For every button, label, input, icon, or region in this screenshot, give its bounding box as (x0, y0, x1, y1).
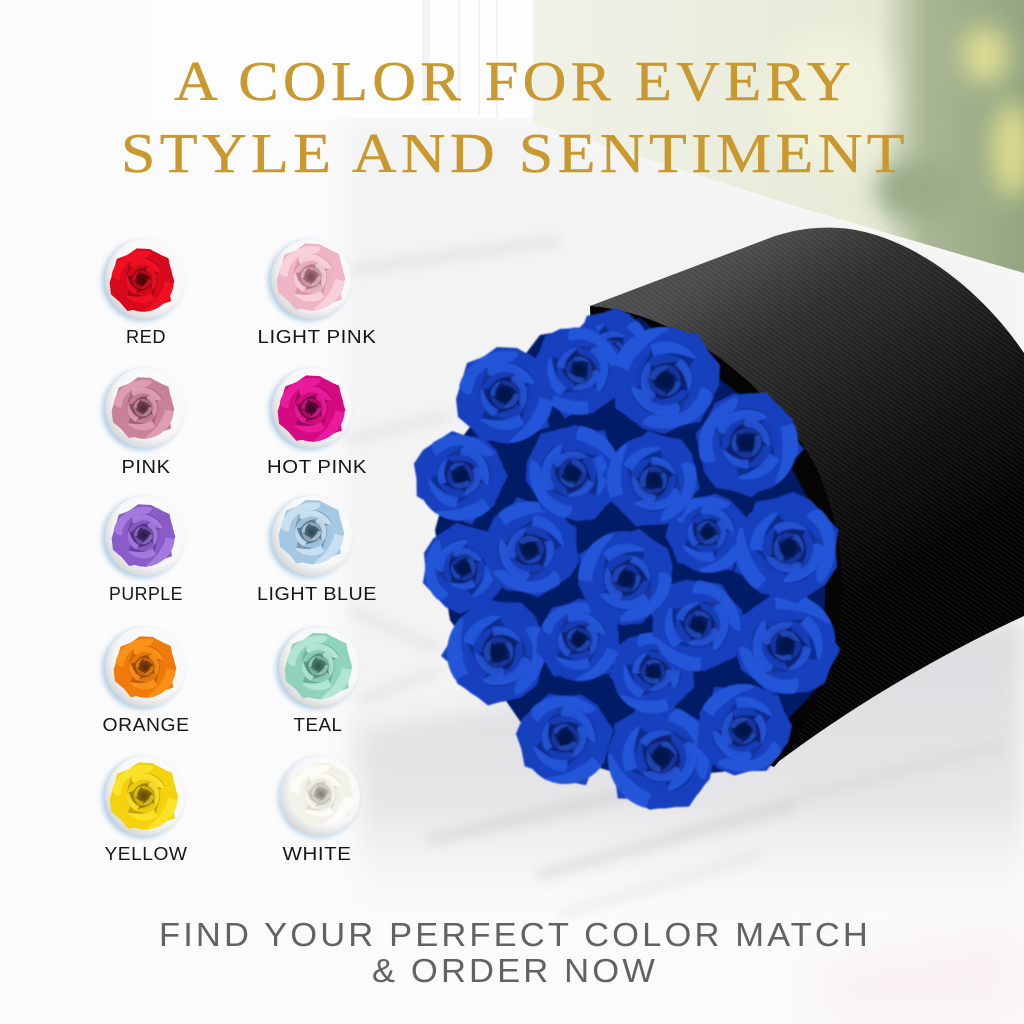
swatch: white: WHITE (282, 844, 352, 864)
title (121, 51, 909, 185)
swatch: red: RED (126, 327, 166, 347)
swatch: light pink (258, 239, 376, 347)
swatch: red (102, 239, 185, 347)
product: blue roses bouquet (397, 295, 859, 819)
swatch: purple: PURPLE (109, 584, 183, 604)
swatch: hot pink: HOT PINK (267, 457, 367, 477)
call to action: FIND YOUR PERFECT COLOR MATCH (159, 916, 871, 953)
call to action (159, 916, 871, 989)
product: black cylindrical box (590, 228, 1024, 767)
panel: color swatches (102, 239, 377, 864)
swatch: light pink: LIGHT PINK (258, 327, 376, 347)
call to action: & ORDER NOW (372, 952, 658, 989)
title: A COLOR FOR EVERY (174, 51, 855, 113)
title: STYLE AND SENTIMENT (121, 123, 909, 185)
swatch: pink (102, 368, 185, 477)
swatch: hot pink (267, 368, 367, 477)
swatch: yellow (102, 756, 188, 864)
swatch: teal: TEAL (294, 715, 342, 735)
swatch: white (278, 756, 360, 864)
background: blurred garden window (533, 0, 1024, 273)
swatch: light blue: LIGHT BLUE (257, 584, 377, 604)
swatch: purple (102, 496, 185, 604)
swatch: yellow: YELLOW (104, 844, 188, 864)
swatch: orange: ORANGE (102, 715, 190, 735)
swatch: teal (276, 627, 359, 735)
swatch: light blue (257, 496, 377, 604)
swatch: pink: PINK (122, 457, 170, 477)
swatch: orange (102, 627, 190, 735)
